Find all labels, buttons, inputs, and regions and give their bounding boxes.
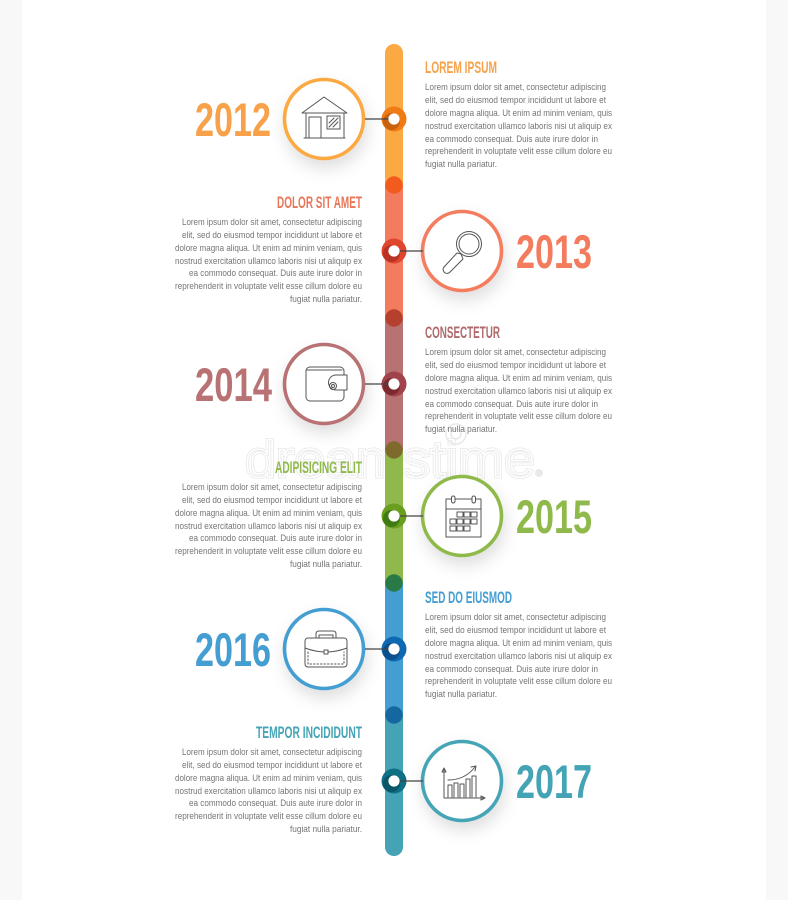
year 2012: 2012	[195, 93, 271, 146]
milestone 2014	[195, 344, 406, 424]
text block: sed do eiusmod: nostrud exercitation ullamco laboris nisi ut aliquip ex	[425, 651, 612, 661]
text block: dolor sit amet: elit, sed do eiusmod tempor incididunt ut labore et	[182, 230, 362, 240]
text block: tempor incididunt: elit, sed do eiusmod tempor incididunt ut labore et	[182, 760, 362, 770]
text block: adipisicing elit: fugiat nulla pariatur.	[290, 559, 362, 569]
icon: growth chart	[442, 766, 485, 800]
text block: lorem ipsum: LOREM IPSUM	[425, 59, 497, 77]
text block: lorem ipsum: nostrud exercitation ullamco laboris nisi ut aliquip ex	[425, 121, 612, 131]
circle 2017	[422, 742, 502, 820]
text block: tempor incididunt	[175, 724, 362, 834]
text block: sed do eiusmod: Lorem ipsum dolor sit amet, consectetur adipiscing	[425, 612, 606, 622]
text block: adipisicing elit: elit, sed do eiusmod tempor incididunt ut labore et	[182, 495, 362, 505]
text block: adipisicing elit: reprehenderit in voluptate velit esse cillum dolore eu	[175, 546, 362, 556]
text block: adipisicing elit: ea commodo consequat. Duis aute irure dolor in	[189, 533, 362, 543]
text block: adipisicing elit: nostrud exercitation ullamco laboris nisi ut aliquip ex	[175, 521, 362, 531]
text block: adipisicing elit	[175, 459, 362, 569]
timeline node	[365, 372, 406, 396]
year 2016: 2016	[195, 623, 271, 676]
year 2017: 2017	[516, 755, 592, 808]
icon: magnifier	[443, 232, 482, 273]
timeline node	[365, 636, 406, 662]
text block: tempor incididunt: Lorem ipsum dolor sit amet, consectetur adipiscing	[182, 747, 362, 757]
timeline node	[382, 238, 423, 264]
timeline node	[382, 504, 423, 528]
text block: dolor sit amet: reprehenderit in voluptate velit esse cillum dolore eu	[175, 281, 362, 291]
text block: lorem ipsum: dolore magna aliqua. Ut enim ad minim veniam, quis	[425, 108, 612, 118]
text block: sed do eiusmod: dolore magna aliqua. Ut enim ad minim veniam, quis	[425, 638, 612, 648]
timeline node	[382, 768, 423, 794]
text block: dolor sit amet: dolore magna aliqua. Ut enim ad minim veniam, quis	[175, 243, 362, 253]
text block: adipisicing elit: dolore magna aliqua. Ut enim ad minim veniam, quis	[175, 508, 362, 518]
text block: lorem ipsum: Lorem ipsum dolor sit amet, consectetur adipiscing	[425, 82, 606, 92]
text block: lorem ipsum: elit, sed do eiusmod tempor incididunt ut labore et	[425, 95, 606, 105]
text block: sed do eiusmod: reprehenderit in voluptate velit esse cillum dolore eu	[425, 676, 612, 686]
text block: tempor incididunt: dolore magna aliqua. Ut enim ad minim veniam, quis	[175, 773, 362, 783]
year 2014: 2014	[195, 358, 272, 411]
text block: sed do eiusmod	[425, 589, 612, 699]
text block: tempor incididunt: nostrud exercitation ullamco laboris nisi ut aliquip ex	[175, 786, 362, 796]
text block: dolor sit amet: nostrud exercitation ullamco laboris nisi ut aliquip ex	[175, 256, 362, 266]
text block: consectetur: nostrud exercitation ullamco laboris nisi ut aliquip ex	[425, 386, 612, 396]
circle 2016	[284, 610, 364, 688]
year 2013: 2013	[516, 225, 592, 278]
circle 2015	[422, 476, 502, 556]
circle 2014	[284, 344, 364, 424]
icon: wallet	[306, 367, 347, 401]
text block: adipisicing elit: ADIPISICING ELIT	[275, 459, 362, 477]
text block: sed do eiusmod: elit, sed do eiusmod tempor incididunt ut labore et	[425, 625, 606, 635]
text block: consectetur: elit, sed do eiusmod tempor incididunt ut labore et	[425, 360, 606, 370]
milestone 2015	[382, 476, 592, 556]
text block: consectetur: reprehenderit in voluptate velit esse cillum dolore eu	[425, 411, 612, 421]
text block: dolor sit amet	[175, 194, 362, 304]
watermark: dreamstime	[245, 431, 535, 489]
text block: dolor sit amet: fugiat nulla pariatur.	[290, 294, 362, 304]
text block: consectetur: Lorem ipsum dolor sit amet, consectetur adipiscing	[425, 347, 606, 357]
text block: tempor incididunt: TEMPOR INCIDIDUNT	[256, 724, 362, 742]
icon: calendar	[446, 496, 481, 537]
text block: adipisicing elit: Lorem ipsum dolor sit amet, consectetur adipiscing	[182, 482, 362, 492]
text block: consectetur	[425, 324, 612, 434]
text block: sed do eiusmod: fugiat nulla pariatur.	[425, 689, 497, 699]
milestone 2017	[382, 742, 592, 820]
text block: lorem ipsum: fugiat nulla pariatur.	[425, 159, 497, 169]
circle 2012	[284, 80, 364, 158]
text block: lorem ipsum: ea commodo consequat. Duis aute irure dolor in	[425, 134, 598, 144]
text block: tempor incididunt: fugiat nulla pariatur.	[290, 824, 362, 834]
year 2015: 2015	[516, 490, 592, 543]
milestone 2013	[382, 212, 592, 290]
text block: dolor sit amet: DOLOR SIT AMET	[277, 194, 362, 212]
text block: consectetur: dolore magna aliqua. Ut enim ad minim veniam, quis	[425, 373, 612, 383]
text block: consectetur: CONSECTETUR	[425, 324, 500, 342]
circle 2013	[422, 212, 502, 290]
text block: consectetur: ea commodo consequat. Duis aute irure dolor in	[425, 399, 598, 409]
text block: sed do eiusmod: SED DO EIUSMOD	[425, 589, 512, 607]
text block: dolor sit amet: ea commodo consequat. Duis aute irure dolor in	[189, 268, 362, 278]
text block: tempor incididunt: reprehenderit in voluptate velit esse cillum dolore eu	[175, 811, 362, 821]
text block: consectetur: fugiat nulla pariatur.	[425, 424, 497, 434]
text block: dolor sit amet: Lorem ipsum dolor sit amet, consectetur adipiscing	[182, 217, 362, 227]
text block: lorem ipsum: reprehenderit in voluptate velit esse cillum dolore eu	[425, 146, 612, 156]
icon: house	[302, 97, 347, 138]
timeline node	[365, 106, 406, 132]
milestone 2012	[195, 80, 406, 158]
watermark: dreamstime	[245, 431, 535, 489]
milestone 2016	[195, 610, 406, 688]
text block: sed do eiusmod: ea commodo consequat. Duis aute irure dolor in	[425, 664, 598, 674]
text block: tempor incididunt: ea commodo consequat. Duis aute irure dolor in	[189, 798, 362, 808]
icon: briefcase	[305, 631, 347, 667]
text block: lorem ipsum	[425, 59, 612, 169]
timeline bar	[385, 44, 403, 856]
